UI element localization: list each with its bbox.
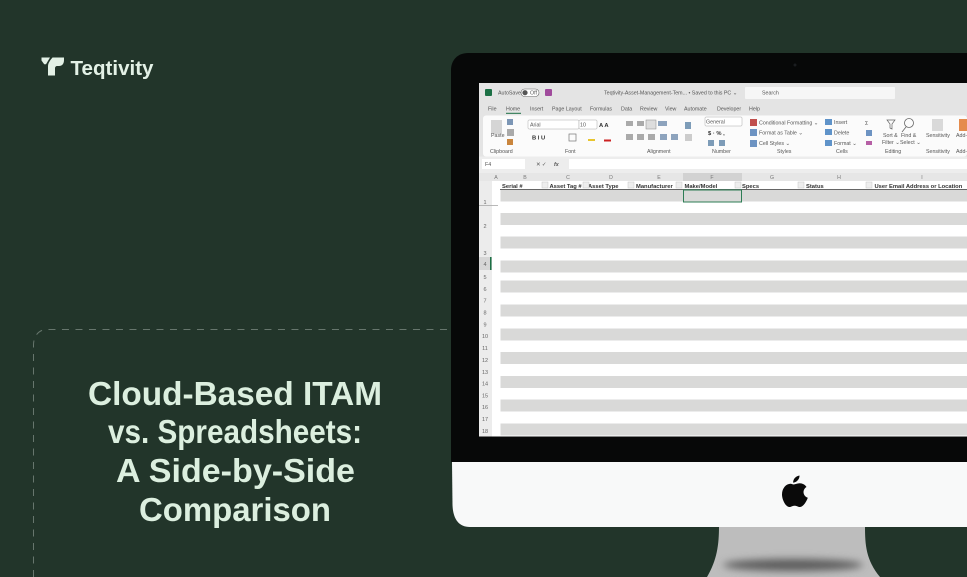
ribbon: Add- [956,149,967,155]
monitor chin [452,462,967,527]
formula bar [479,156,967,173]
row headers: 6 [483,287,487,293]
menu tabs: Help [749,106,760,112]
menu tabs: Developer [717,106,741,112]
formula bar: fx [554,162,560,168]
formula bar: ✕ ✓ [536,162,546,168]
title bar: Teqtivity-Asset-Management-Tem... • Saved to this PC ⌄ [604,90,737,96]
ribbon: Clipboard [490,149,513,155]
menu tabs [479,102,967,116]
ribbon: Arial [530,122,541,128]
row headers: 3 [483,251,487,257]
spreadsheet screen [479,83,967,436]
icon: apple logo [782,476,808,507]
ribbon: Number [712,149,731,155]
table header: Serial # [502,184,523,190]
column headers: B [523,175,527,181]
row headers: 5 [483,275,487,281]
row headers: 1 [483,200,487,206]
title bar [479,83,967,102]
ribbon: Filter ⌄ [882,140,900,146]
ribbon: A A [599,123,609,129]
row headers: 15 [482,394,488,400]
ribbon: $ · % , [708,131,725,137]
row headers: 14 [482,382,488,388]
title bar: Off [530,90,537,96]
title: vs. Spreadsheets: [108,413,362,450]
ribbon: General [706,120,725,126]
menu tabs: Formulas [590,106,612,112]
row headers: 11 [482,346,488,352]
banded rows [500,190,967,436]
ribbon: Sort & [883,133,898,139]
menu tabs: Review [640,106,658,112]
table header: Asset Tag # [550,184,582,190]
title: Cloud-Based ITAM [88,375,382,412]
column headers: C [566,175,570,181]
table header: Asset Type [588,184,619,190]
menu tabs: Automate [684,106,707,112]
row headers: 9 [483,322,487,328]
ribbon: Paste [491,133,505,139]
ribbon: Sensitivity [926,149,950,155]
row headers: 8 [483,310,487,316]
column headers: G [770,175,774,181]
ribbon: Delete [834,130,849,136]
table header [500,182,967,190]
monitor stand [707,526,880,577]
row headers: 13 [482,370,488,376]
ribbon: Σ [865,121,869,127]
row headers: 12 [482,358,488,364]
title: Comparison [139,491,331,528]
row headers: 10 [482,334,488,340]
table header: Specs [742,184,759,190]
table header: Manufacturer [636,184,673,190]
ribbon: Alignment [647,149,671,155]
column headers: A [494,175,498,181]
menu tabs: Insert [530,106,544,112]
ribbon: Format ⌄ [834,141,857,147]
row headers: 17 [482,417,488,423]
column headers: E [657,175,661,181]
ribbon: 10 [580,122,586,128]
column headers [479,173,967,181]
title [88,375,382,528]
logo: Teqtivity: Teqtivity [70,57,154,80]
row headers [479,181,498,436]
column headers: F [710,175,714,181]
row headers: 2 [483,224,487,230]
menu tabs: Page Layout [552,106,582,112]
column headers: I [921,175,923,181]
row headers: 18 [482,429,488,435]
title bar: AutoSave [498,90,521,96]
ribbon: Add- [956,133,967,139]
ribbon: Sensitivity [926,133,950,139]
ribbon: Format as Table ⌄ [759,130,803,136]
row headers: 16 [482,405,488,411]
ribbon: Insert [834,120,848,126]
formula bar: F4 [485,162,491,168]
row headers: 7 [483,298,487,304]
title: A Side-by-Side [116,452,355,489]
row headers: 4 [483,262,487,268]
ribbon: B I U [532,136,545,142]
menu tabs: File [488,106,497,112]
ribbon: Editing [885,149,901,155]
column headers: D [609,175,613,181]
ribbon: Font [565,149,576,155]
selected cell F4 [684,190,742,202]
title bar: Search [762,90,779,96]
ribbon: Find & [901,133,917,139]
ribbon: Cells [836,149,848,155]
ribbon [479,116,967,158]
column headers: H [837,175,841,181]
table header: Make/Model [684,184,718,190]
ribbon: Styles [777,149,792,155]
menu tabs: View [665,106,677,112]
dashed frame [34,330,450,577]
camera [794,64,796,66]
ribbon: Select ⌄ [900,140,921,146]
monitor bezel [451,53,967,462]
ribbon: Cell Styles ⌄ [759,141,790,147]
table header: Status [806,184,824,190]
menu tabs: Home [506,106,520,112]
menu tabs: Data [621,106,632,112]
ribbon: Conditional Formatting ⌄ [759,120,818,126]
table header: User Email Address or Location [874,184,963,190]
